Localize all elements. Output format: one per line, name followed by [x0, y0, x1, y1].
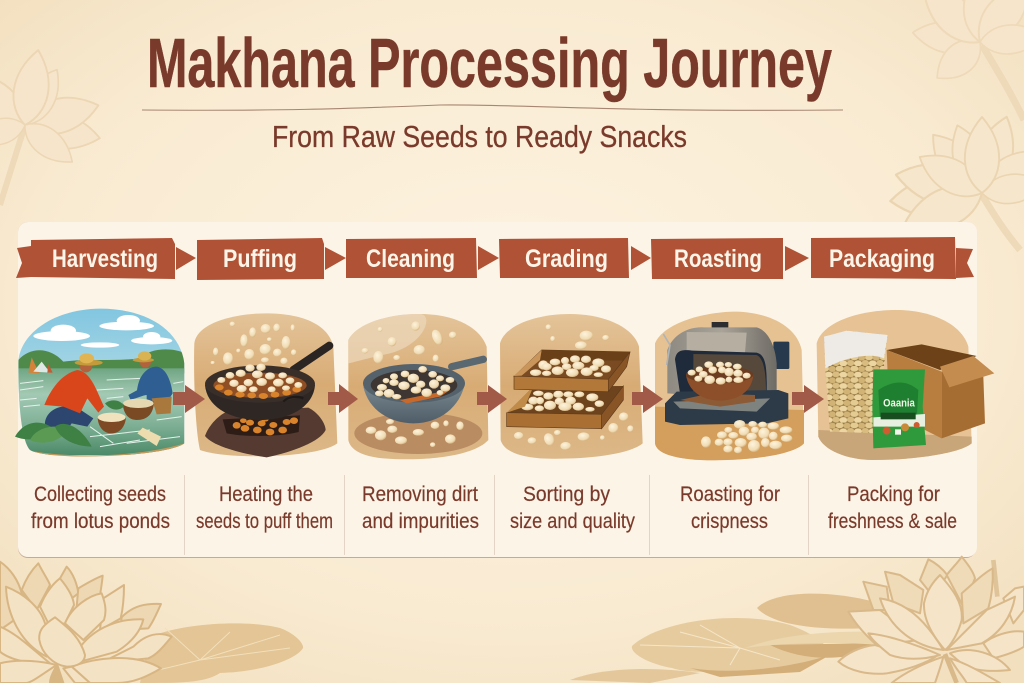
caption: roasting: crispness	[691, 510, 768, 533]
seed pile	[701, 420, 792, 453]
loose seeds	[514, 324, 633, 450]
illustration: grading	[500, 314, 643, 459]
illustration: packaging	[817, 310, 994, 460]
banner: Puffing: Puffing	[223, 245, 297, 273]
lotus leaves	[15, 400, 124, 447]
illustration: harvesting	[15, 309, 185, 463]
roaster base	[665, 390, 788, 425]
banner: Grading: Grading	[525, 245, 608, 273]
banner: Packaging	[811, 237, 956, 279]
illustration: puffing	[194, 313, 337, 457]
arrow: cleaning to grading	[477, 385, 507, 413]
caption: packaging	[828, 483, 957, 533]
caption: roasting: Roasting for	[680, 483, 780, 506]
caption: packaging: freshness & sale	[828, 510, 957, 533]
caption: cleaning: and impurities	[362, 510, 479, 533]
banner arrow 4	[631, 246, 651, 270]
roaster hood	[663, 322, 777, 400]
subtitle: From Raw Seeds to Ready Snacks	[272, 119, 687, 154]
banner: Roasting	[651, 238, 783, 279]
banner: Harvesting: Harvesting	[52, 245, 158, 273]
caption: packaging: Packing for	[847, 483, 940, 506]
figure: farmer in red	[44, 353, 104, 430]
banner arrow 5	[785, 246, 809, 271]
basket: front	[98, 413, 126, 433]
puffed seeds in air	[211, 322, 296, 365]
tray: lower	[507, 386, 623, 429]
banner tail: right	[956, 248, 974, 278]
lotus pods	[137, 428, 161, 446]
banner: Cleaning	[346, 238, 477, 278]
figure: farmer in blue	[128, 351, 173, 414]
decoration: bottom left lotus	[0, 562, 172, 683]
pan handle	[293, 346, 329, 370]
decoration: bottom left lily pad	[140, 623, 303, 683]
arrow: roasting to packaging	[792, 385, 824, 413]
roaster side box	[773, 342, 789, 369]
tray: upper	[514, 350, 630, 392]
banner: Harvesting	[31, 238, 175, 279]
banner: Puffing	[197, 238, 324, 280]
decoration: top right lotus	[911, 0, 1024, 120]
banner: Roasting: Roasting	[674, 245, 762, 273]
caption dividers	[184, 475, 808, 555]
caption: harvesting	[31, 483, 170, 533]
pan	[205, 364, 315, 420]
panel: process card	[18, 222, 977, 558]
banner arrow 1	[176, 247, 196, 270]
pan	[363, 364, 465, 423]
pan handle	[452, 359, 483, 367]
caption: cleaning	[362, 483, 479, 533]
caption: roasting	[680, 483, 780, 533]
decoration: bottom right lily pads	[570, 594, 880, 683]
decoration: top left lotus	[0, 47, 103, 205]
arrow: puffing to cleaning	[328, 384, 358, 413]
caption: harvesting: from lotus ponds	[31, 510, 170, 533]
green snack pack	[872, 369, 926, 448]
caption: grading: Sorting by	[523, 483, 610, 506]
clear bag	[824, 331, 888, 433]
green snack pack: Oaania	[883, 398, 915, 410]
roaster bowl	[686, 361, 753, 401]
basket: centre	[123, 399, 154, 420]
illustration: cleaning	[348, 314, 488, 459]
caption: grading	[510, 483, 635, 533]
banner tail: left	[16, 246, 31, 278]
illustration: roasting	[655, 312, 804, 460]
banner: Packaging: Packaging	[829, 245, 935, 273]
stove	[205, 408, 326, 457]
banner arrow 2	[325, 247, 346, 270]
banner arrow 3	[478, 246, 499, 270]
caption: puffing	[196, 483, 333, 533]
arrow: harvesting to puffing	[173, 385, 205, 413]
caption: puffing: seeds to puff them	[196, 510, 333, 533]
title divider	[142, 105, 843, 110]
ground shadow	[354, 413, 482, 454]
cardboard box	[887, 344, 994, 438]
banner: Cleaning: Cleaning	[366, 245, 455, 273]
banner: Grading	[499, 238, 629, 278]
caption: puffing: Heating the	[219, 483, 313, 506]
arrow: grading to roasting	[632, 385, 663, 413]
decoration: right lotus	[889, 111, 1024, 250]
decoration: bottom right lotus	[838, 557, 1024, 683]
caption: harvesting: Collecting seeds	[34, 483, 166, 506]
falling seeds	[362, 321, 464, 447]
caption: cleaning: Removing dirt	[362, 483, 478, 506]
step banners	[16, 237, 974, 280]
caption: grading: size and quality	[510, 510, 635, 533]
